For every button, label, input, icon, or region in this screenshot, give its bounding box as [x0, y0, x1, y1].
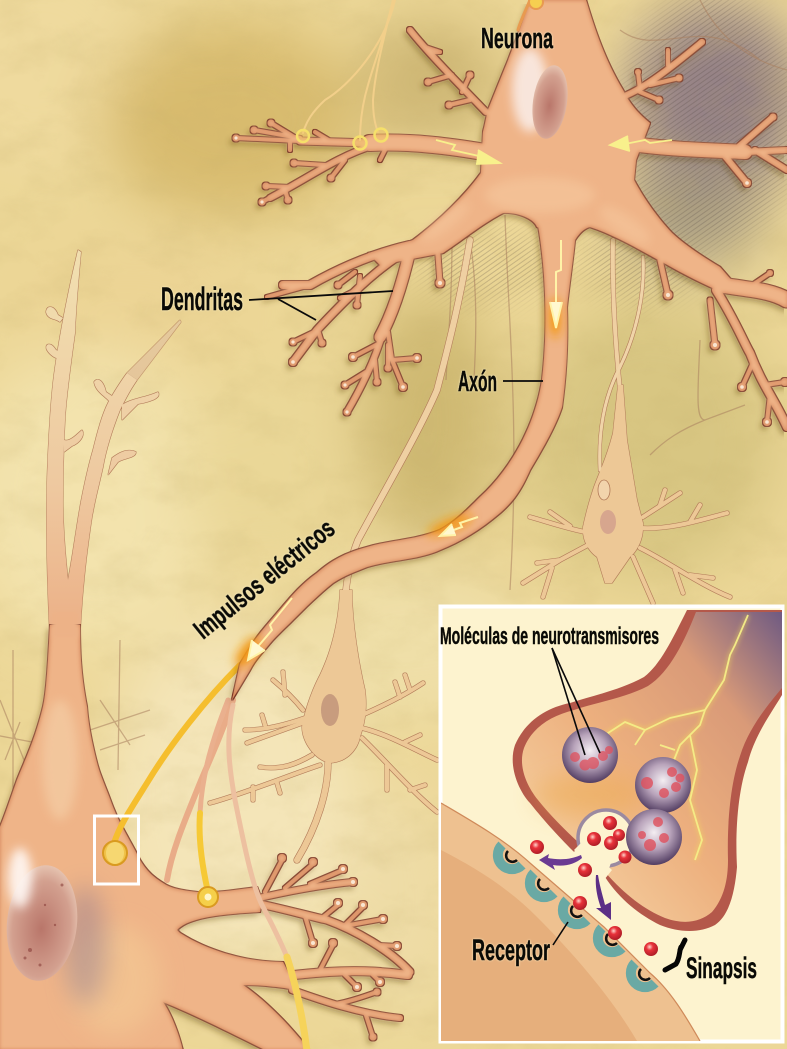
vesicle: upper right [635, 757, 691, 813]
neuron: lower-left apical stems [46, 250, 181, 640]
soma shading: lower-left neuron [1, 612, 160, 1035]
highlight box on synapse [94, 816, 138, 884]
label: electrical impulses: Impulsos eléctricos [188, 513, 340, 645]
vesicle: releasing opening [574, 808, 632, 878]
vesicle: with label target [562, 727, 618, 783]
vesicle bouton on right neuron [598, 480, 610, 500]
neuron: background right neuron [523, 240, 730, 603]
impulse glows along axon [231, 298, 561, 671]
neuron: lower-left large neuron [0, 625, 410, 1049]
presynaptic strands at top [297, 0, 543, 150]
neuron: background middle neuron [210, 240, 470, 860]
purple arrows [539, 854, 611, 920]
bracket mark: sinapsis [665, 940, 685, 970]
leader line: receptor [553, 922, 568, 945]
postsynaptic membrane [441, 803, 700, 1041]
presynaptic terminal [513, 610, 782, 931]
vesicle: fusing [626, 809, 682, 865]
arrow: axon distal impulse [248, 598, 292, 660]
panel: synapse inset [440, 606, 782, 1042]
arrow: axon impulse [550, 240, 562, 328]
lightning bolts [605, 615, 748, 860]
arrow: left dendrite impulse [436, 140, 500, 164]
neurotransmitter molecules [530, 816, 658, 956]
leader lines: dendrites [249, 291, 393, 320]
leader line: axon [503, 380, 543, 382]
arrow: right dendrite impulse [610, 136, 672, 151]
nucleus: right neuron [600, 510, 616, 534]
faint sketched neurons [0, 0, 787, 790]
label: axon: Axón [458, 366, 497, 398]
leader lines: neurotransmitters [552, 648, 600, 755]
nucleus: lower-left neuron [1, 862, 83, 984]
soma details: top neuron nucleus [416, 48, 655, 250]
receptors [498, 845, 655, 987]
dendrite tip highlights [234, 136, 769, 989]
nucleus: middle neuron [321, 694, 339, 726]
label: dendrites: Dendritas [161, 281, 243, 317]
axon terminal branches [103, 665, 307, 1049]
neuron: top neuron with dendrites and axon [232, 0, 787, 700]
label: neuron: Neurona [481, 23, 554, 55]
arrow: axon mid impulse [440, 517, 478, 536]
label: receptor: Receptor [472, 934, 550, 967]
